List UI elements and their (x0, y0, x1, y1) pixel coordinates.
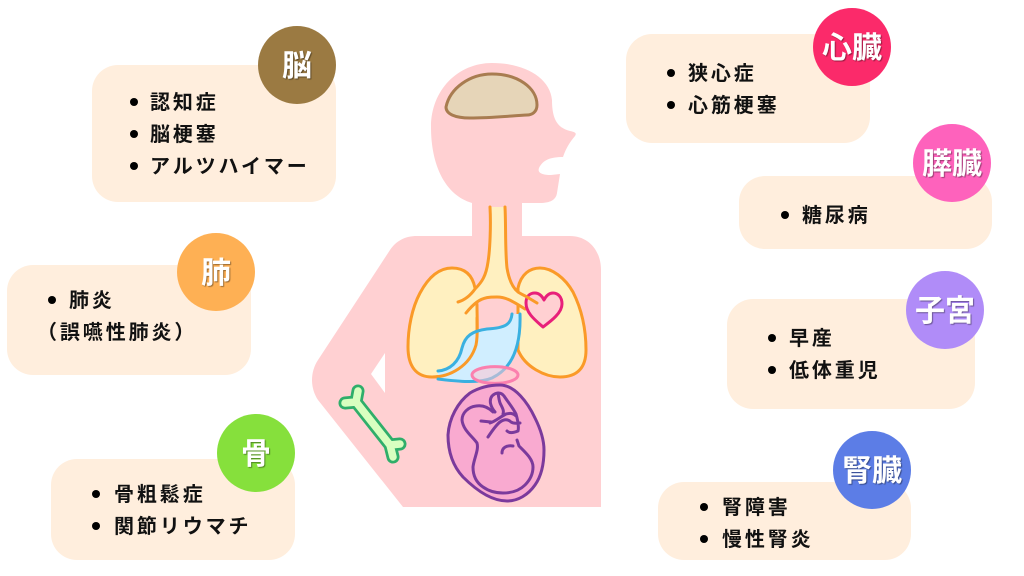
badge: 骨: 骨 (241, 438, 271, 471)
panel: 膵臓 (739, 176, 992, 249)
list: 肺: 肺炎 (69, 290, 115, 312)
panel: 肺 (7, 265, 251, 375)
badge: 脳 (258, 26, 336, 104)
panel: 心臓 (626, 34, 870, 143)
body silhouette (312, 63, 601, 507)
list: 骨 (92, 484, 251, 538)
badge: 脳: 脳 (282, 50, 312, 83)
badge: 膵臓 (913, 124, 991, 202)
list: 骨: 骨粗鬆症 (114, 484, 206, 506)
badge: 骨 (217, 414, 295, 492)
badge: 肺 (177, 233, 255, 311)
list: 膵臓: 糖尿病 (802, 205, 871, 227)
liver (432, 314, 520, 382)
brain (446, 74, 537, 118)
heart (526, 293, 562, 327)
badge: 肺: 肺 (201, 257, 231, 290)
list: 心臓: 狭心症 (688, 63, 757, 85)
badge: 心臓: 心臓 (822, 32, 882, 65)
list: 腎臓: 慢性腎炎 (722, 529, 814, 551)
lung edge over liver (432, 318, 477, 377)
panel: 骨 (51, 459, 295, 560)
list: 子宮: 低体重児 (789, 360, 881, 382)
badge: 膵臓: 膵臓 (922, 148, 982, 181)
panel: 子宮 (727, 299, 975, 409)
arm gap (371, 353, 385, 393)
list: 腎臓: 腎障害 (722, 497, 791, 519)
uterus and fetus (448, 385, 544, 501)
fetus (462, 406, 533, 493)
list: 骨: 関節リウマチ (114, 516, 251, 538)
uterus (448, 385, 544, 501)
left lung (408, 268, 477, 377)
list: 肺: （誤嚥性肺炎） (37, 322, 197, 344)
pancreas (472, 367, 518, 383)
lungs and trachea (408, 207, 586, 377)
list: 心臓: 心筋梗塞 (688, 95, 780, 117)
badge: 腎臓 (833, 431, 911, 509)
list: 子宮 (768, 328, 881, 382)
list: 子宮: 早産 (789, 328, 835, 350)
fetus limbs (481, 393, 520, 453)
list: 脳 (130, 92, 310, 178)
list: 腎臓 (700, 496, 814, 551)
list: 脳: 脳梗塞 (150, 124, 219, 146)
badge: 子宮: 子宮 (915, 295, 975, 328)
panel: 脳 (92, 65, 336, 202)
list: 心臓 (667, 62, 780, 117)
badge: 心臓 (813, 8, 891, 86)
list: 脳: 認知症 (150, 92, 219, 114)
list: 脳: アルツハイマー (150, 156, 310, 178)
trachea and bronchi (458, 207, 537, 313)
right lung (518, 268, 586, 377)
list: 肺 (37, 290, 197, 344)
bone (345, 391, 400, 457)
badge: 子宮 (906, 271, 984, 349)
badge: 腎臓: 腎臓 (842, 455, 902, 488)
bronchus end over heart (527, 297, 537, 303)
panel: 腎臓 (658, 482, 911, 560)
